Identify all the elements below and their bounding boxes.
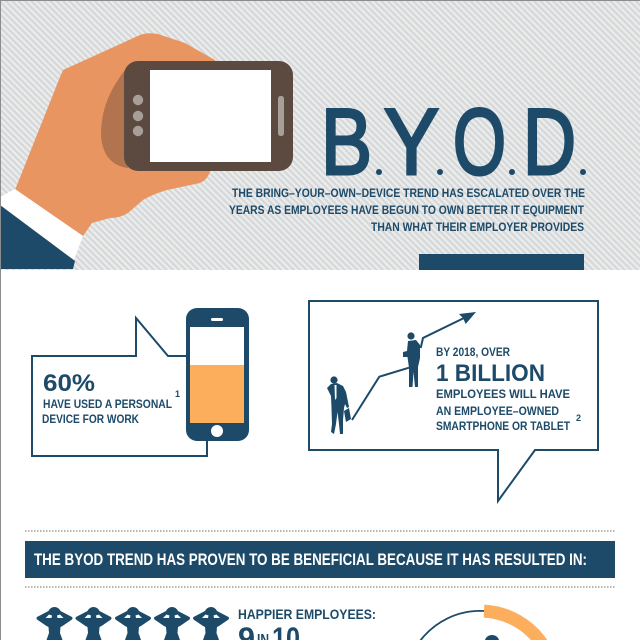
footnote 2: 2 xyxy=(576,413,581,423)
phone body xyxy=(186,308,249,441)
growth arrow xyxy=(352,312,476,420)
icon row: five employees xyxy=(36,607,229,640)
title: Y xyxy=(384,89,439,194)
footnote 1: 1 xyxy=(175,389,180,399)
speaker xyxy=(211,318,223,321)
title xyxy=(321,89,586,194)
statistic value: 60% xyxy=(43,370,95,397)
subtitle: YEARS AS EMPLOYEES HAVE BEGUN TO OWN BETTER IT EQUIPMENT xyxy=(229,205,584,217)
happier employees label: HAPPIER EMPLOYEES: xyxy=(238,606,376,622)
panel: 60 percent statistic xyxy=(32,308,249,456)
phone speaker xyxy=(278,96,284,136)
striped header background xyxy=(0,0,640,270)
hand xyxy=(15,33,225,236)
title: D xyxy=(523,89,576,194)
header accent bar xyxy=(419,254,584,270)
phone buttons xyxy=(133,95,143,136)
subtitle: THAN WHAT THEIR EMPLOYER PROVIDES xyxy=(371,222,584,234)
statistic text: SMARTPHONE OR TABLET xyxy=(436,421,570,433)
shirt cuff xyxy=(0,189,83,260)
phone screen xyxy=(150,70,271,162)
banner: benefits heading xyxy=(25,531,615,587)
statistic text: AN EMPLOYEE–OWNED xyxy=(436,406,559,418)
icon: smartphone battery xyxy=(186,308,249,441)
thumb shadow xyxy=(101,70,128,168)
statistic text: 1 BILLION xyxy=(436,360,545,387)
statistic text xyxy=(436,347,570,433)
gauge orange arc xyxy=(484,611,543,640)
home button xyxy=(211,425,223,437)
statistic text: BY 2018, OVER xyxy=(436,347,511,359)
gauge track xyxy=(419,611,484,640)
statistic description xyxy=(42,399,172,426)
phone body xyxy=(124,61,293,171)
icon: person in gauge xyxy=(485,635,499,640)
statistic text: EMPLOYEES WILL HAVE xyxy=(436,389,570,401)
speech bubble xyxy=(309,301,598,501)
icon: businessman on the rise xyxy=(403,332,420,387)
statistic description: HAVE USED A PERSONAL xyxy=(43,399,172,411)
statistic description: DEVICE FOR WORK xyxy=(42,414,140,426)
chart: donut gauge xyxy=(419,611,543,640)
suit sleeve xyxy=(0,205,75,269)
title: O xyxy=(453,89,506,194)
icon: businessman on phone xyxy=(327,376,351,434)
panel: happier employees xyxy=(36,606,376,640)
title: B xyxy=(321,89,372,194)
icon: hand holding phone xyxy=(0,33,293,269)
speech bubble xyxy=(32,318,207,456)
panel: 1 billion statistic xyxy=(309,301,598,501)
subtitle: THE BRING–YOUR–OWN–DEVICE TREND HAS ESCALATED OVER THE xyxy=(232,188,585,200)
nine in ten value xyxy=(238,622,300,640)
screen empty part xyxy=(190,327,244,366)
subtitle xyxy=(229,188,585,234)
screen orange fill xyxy=(190,365,244,423)
